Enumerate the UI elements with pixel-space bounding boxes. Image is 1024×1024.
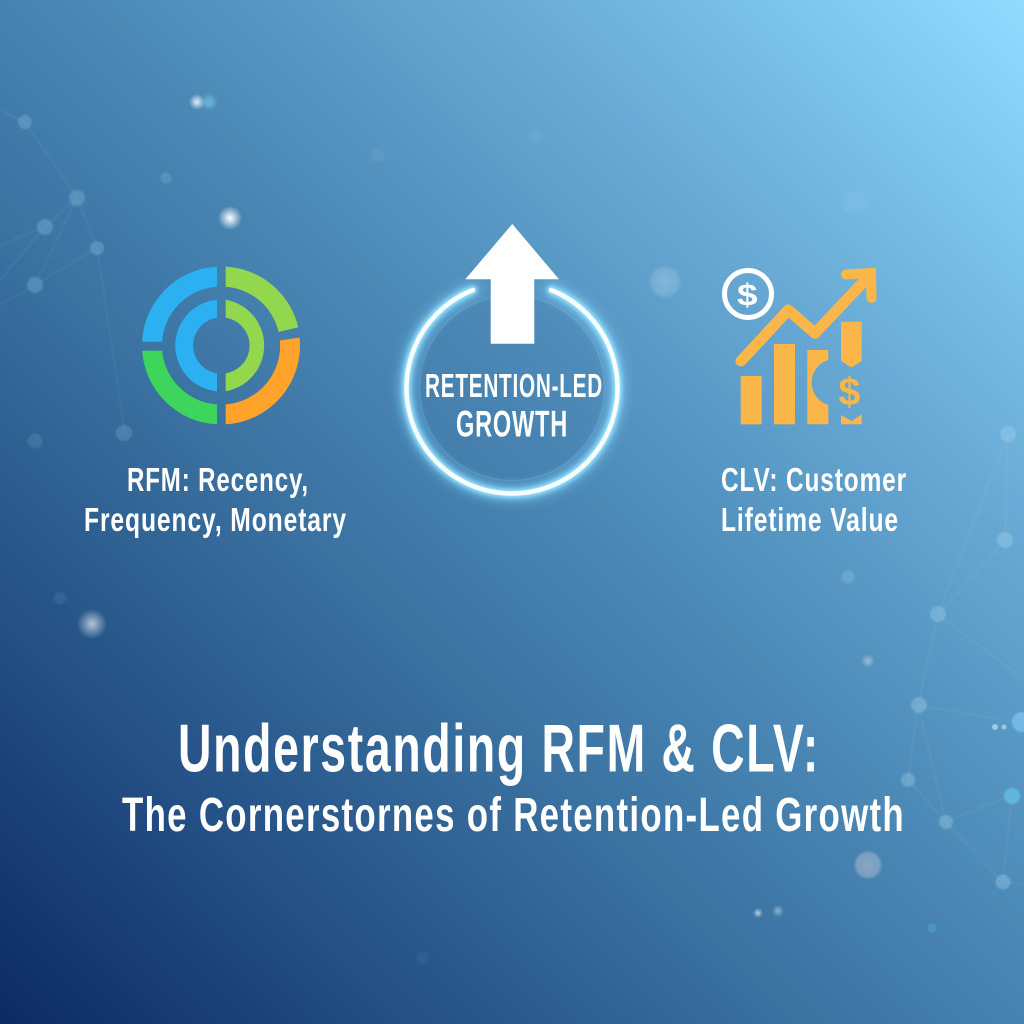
left network decoration — [0, 110, 172, 604]
badge text — [425, 367, 603, 444]
label: RFM: RFM: Recency, — [127, 461, 309, 498]
icon: RFM concentric ring — [142, 267, 300, 424]
label: CLV: Lifetime Value — [721, 501, 899, 538]
bokeh lights — [77, 94, 1006, 965]
ring inner glow — [406, 290, 618, 494]
badge text: GROWTH — [456, 404, 568, 444]
inner segment: lime — [226, 300, 264, 391]
ring — [406, 290, 618, 494]
title — [122, 710, 905, 842]
bars — [741, 322, 862, 424]
ring glow — [406, 290, 618, 494]
inner disc — [420, 296, 604, 480]
label: RFM — [84, 461, 347, 538]
rising arrow — [741, 273, 872, 361]
coin — [724, 270, 772, 318]
outer segment: green — [142, 351, 217, 424]
inner segment: blue — [175, 300, 217, 391]
dollar sign: $ — [838, 371, 862, 414]
coin: $ — [737, 277, 759, 312]
arrow up — [465, 224, 559, 344]
icon: CLV chart — [724, 270, 872, 424]
right network decoration — [842, 426, 1024, 932]
label: CLV: CLV: Customer — [721, 461, 907, 498]
label: CLV — [721, 461, 907, 538]
outer segment: lime — [226, 267, 298, 332]
center badge: retention-led growth — [406, 224, 618, 494]
outer segment: orange — [226, 338, 300, 424]
outer segment: blue — [142, 267, 217, 342]
badge text: RETENTION-LED — [425, 367, 603, 404]
label: RFM: Frequency, Monetary — [84, 501, 347, 538]
